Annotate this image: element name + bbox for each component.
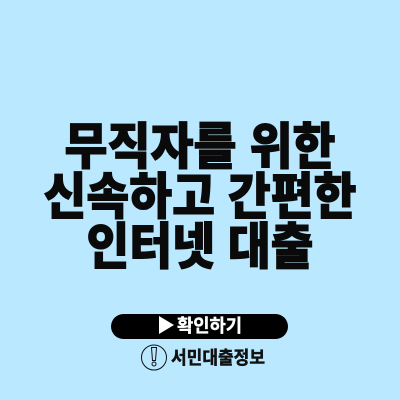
button background	[111, 314, 288, 339]
button: confirm	[111, 314, 288, 339]
title line 3: 인터넷 대출	[86, 219, 314, 275]
button label: 확인하기	[177, 316, 242, 336]
source label: 서민대출정보	[171, 348, 265, 368]
icon: play triangle	[159, 316, 174, 334]
icon: exclamation circle	[142, 345, 166, 370]
title line 2: 신속하고 간편한	[44, 169, 356, 225]
title	[44, 119, 356, 275]
source badge	[142, 345, 265, 370]
title line 1: 무직자를 위한	[64, 119, 336, 175]
